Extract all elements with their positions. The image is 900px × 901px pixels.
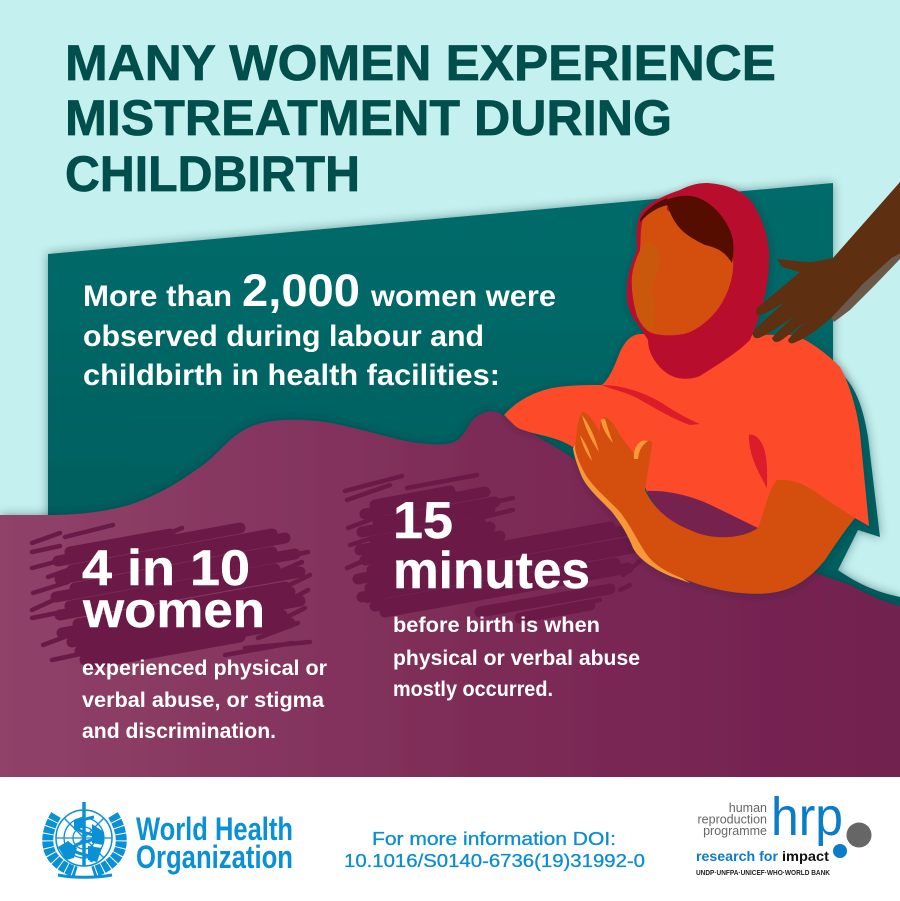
stat description: timing: mostly occurred.: [393, 678, 553, 701]
stat description: abuse: and discrimination.: [82, 720, 276, 743]
intro text: women were: [370, 280, 556, 313]
programme name: programme: [703, 824, 767, 838]
stat: 15 minutes: [393, 492, 590, 600]
tagline: research for: [696, 848, 779, 864]
intro text: More than: [83, 280, 232, 313]
intro text: [83, 265, 556, 392]
stat: 4 in 10 women: [82, 540, 265, 638]
stat description: abuse: [82, 657, 327, 743]
programme name: human: [729, 801, 767, 815]
laurel left: [48, 815, 76, 872]
title: MANY WOMEN EXPERIENCE: [65, 35, 776, 91]
hair: [640, 196, 733, 263]
hijab: [627, 183, 769, 379]
arm shadow: [830, 254, 900, 322]
logo: WHO emblem: [48, 802, 121, 877]
panel: maroon blanket: [0, 411, 900, 777]
stat: 4 in 10 women: women: [82, 582, 265, 638]
intro text: childbirth in health facilities:: [83, 359, 500, 392]
logo: World Health Organization wordmark: World Health: [136, 811, 293, 847]
gray dot: [846, 822, 872, 848]
logo: HRP: [696, 787, 872, 877]
stat description: timing: before birth is when: [393, 614, 600, 637]
stat: 15 minutes: 15: [393, 492, 453, 550]
DOI reference: For more information DOI:: [372, 828, 616, 849]
staff and serpent: [82, 802, 86, 866]
title: [65, 35, 776, 202]
shirt folds: [602, 385, 767, 488]
illustration: woman: [504, 183, 869, 594]
stat: 15 minutes: minutes: [393, 542, 590, 600]
intro text: 2,000: [242, 265, 360, 316]
continents: [58, 816, 104, 862]
DOI reference: [344, 828, 645, 871]
tagline emphasis: impact: [782, 848, 829, 864]
title: CHILDBIRTH: [65, 146, 360, 202]
face: [632, 203, 733, 335]
partners: UNDP·UNFPA·UNICEF·WHO·WORLD BANK: [696, 868, 830, 877]
hrp wordmark: hrp: [771, 787, 843, 847]
stat description: abuse: verbal abuse, or stigma: [82, 689, 324, 712]
globe: [56, 810, 112, 866]
panel: teal backdrop: [48, 183, 900, 640]
laurel right: [93, 815, 121, 872]
illustration: supporting hand: [753, 182, 900, 343]
logo: World Health Organization wordmark: Organization: [136, 839, 293, 875]
programme name: reproduction: [698, 812, 767, 826]
face shadow: [632, 241, 660, 332]
title: MISTREATMENT DURING: [65, 90, 672, 146]
hand: [753, 182, 900, 343]
DOI reference: 10.1016/S0140-6736(19)31992-0: [344, 850, 645, 871]
belly gap: [647, 491, 758, 538]
programme name: [698, 801, 767, 838]
blue dot: [833, 844, 847, 858]
stat description: abuse: experienced physical or: [82, 657, 327, 680]
logo: World Health Organization wordmark: [136, 811, 293, 875]
arm and hand: [575, 412, 855, 594]
stat description: timing: [393, 614, 640, 701]
stat: 4 in 10 women: 4 in 10: [82, 540, 250, 596]
ribbon: [58, 875, 112, 877]
stat description: timing: physical or verbal abuse: [393, 647, 640, 670]
intro text: observed during labour and: [83, 320, 484, 353]
footer: [0, 777, 900, 901]
scribble: behind 4 in 10 women: [32, 525, 310, 664]
scribble: behind 15 minutes: [345, 475, 640, 618]
shirt: [504, 334, 869, 528]
finger highlights: [580, 415, 648, 461]
arm edge highlight: [573, 445, 690, 583]
